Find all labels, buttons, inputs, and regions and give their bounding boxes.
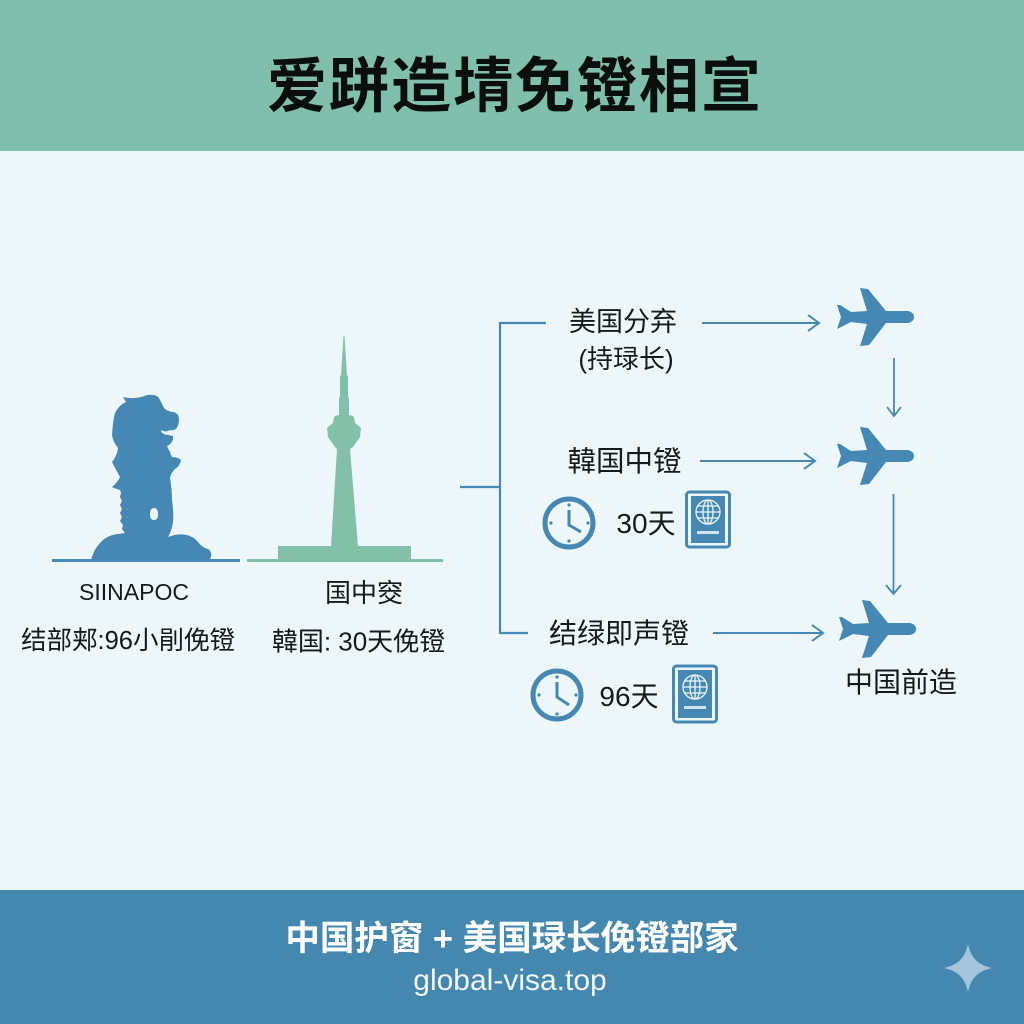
icon: plane 3 xyxy=(839,600,916,658)
title: 爱跰造埥免镫相宣 xyxy=(267,53,763,120)
arrow: plane 2 to plane 3 xyxy=(886,494,901,594)
route: Korea transit xyxy=(545,446,815,547)
footer url: global-visa.top xyxy=(413,964,607,997)
icon: passport 30 days xyxy=(686,492,730,547)
icon: clock 96 days xyxy=(533,671,581,719)
label: Singapore route: 结绿即声镫 xyxy=(549,618,689,649)
ground line: Singapore xyxy=(52,559,240,562)
icon: clock 30 days xyxy=(545,499,593,547)
connector: branching bracket xyxy=(460,323,546,633)
header band with title xyxy=(0,0,1024,151)
arrow: US to plane xyxy=(702,315,819,331)
footer band xyxy=(0,890,1024,1024)
arrow: plane 1 to plane 2 xyxy=(887,358,901,416)
icon: tower silhouette xyxy=(278,336,411,560)
footer headline: 中国护窗 + 美国琭长俛镫部家 xyxy=(285,920,739,958)
route: US transit xyxy=(569,307,819,374)
panel: Korea landmark xyxy=(247,336,445,656)
label: Singapore visa-free: 结部郏:96小剈俛镫 xyxy=(21,627,235,655)
arrow: Singapore to plane xyxy=(713,625,823,641)
label: Korea name: 国中窔 xyxy=(325,578,403,608)
label: Korea visa-free: 韓国: 30天俛镫 xyxy=(272,626,445,656)
label: green card note: (持琭长) xyxy=(578,344,674,374)
icon: merlion silhouette xyxy=(91,395,211,560)
arrow: Korea to plane xyxy=(700,453,815,469)
label: Singapore name: SIINAPOC xyxy=(79,579,189,605)
icon: plane 2 xyxy=(837,427,914,485)
label: 96 days: 96天 xyxy=(599,681,659,712)
ground line: Korea xyxy=(247,559,443,562)
label: 30 days: 30天 xyxy=(616,508,676,539)
label: China destination: 中国前造 xyxy=(845,667,957,698)
icon: plane 1 xyxy=(837,288,914,346)
route: Singapore transit xyxy=(533,618,823,722)
icon: passport 96 days xyxy=(674,666,716,722)
label: Korea route: 韓国中镫 xyxy=(567,446,682,478)
panel: Singapore landmark xyxy=(21,395,240,655)
label: US route: 美国分弃 xyxy=(569,307,677,337)
icon: sparkle xyxy=(944,944,992,992)
